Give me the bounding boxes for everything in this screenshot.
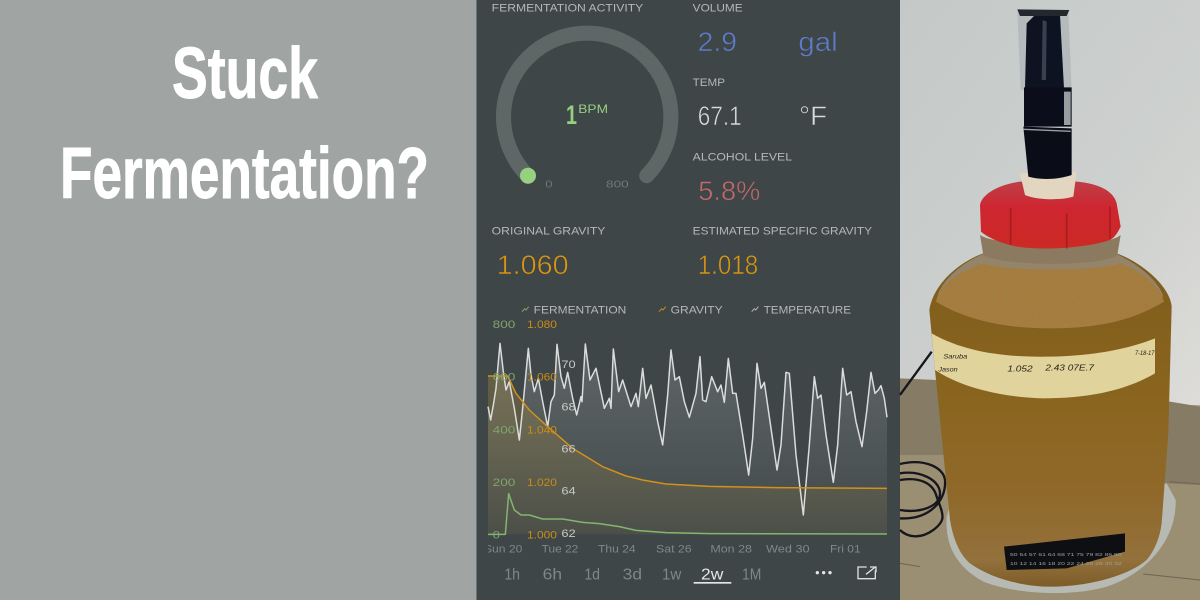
label: fermentation activity: FERMENTATION ACTIVITY xyxy=(492,3,644,15)
fermentation axis xyxy=(493,319,515,541)
foam layer xyxy=(936,263,1164,328)
temperature strip: 10 12 14 16 18 20 22 24 26 28 30 32 xyxy=(1010,561,1122,566)
metric: temperature: °F xyxy=(799,101,827,131)
temperature axis xyxy=(561,359,576,540)
temperature axis: 70 xyxy=(561,359,576,371)
metric: volume: VOLUME xyxy=(693,3,743,15)
title: Fermentation? xyxy=(60,134,429,214)
temperature line xyxy=(488,343,887,515)
fermentation axis: 200 xyxy=(493,477,515,489)
gauge: fermentation activity: 800 xyxy=(606,180,629,191)
gravity axis: 1.000 xyxy=(527,529,557,541)
metric: estimated specific gravity: 1.018 xyxy=(698,250,758,280)
handwriting: 1.052 xyxy=(1007,364,1033,374)
handwriting: Saruba xyxy=(943,353,968,360)
fermentation axis: 600 xyxy=(493,372,515,384)
metric: temperature: TEMP xyxy=(693,77,725,89)
metric: original gravity xyxy=(492,225,606,280)
temperature strip: 50 54 57 61 64 68 71 75 79 82 86 90 xyxy=(1010,552,1122,557)
time range selector: 1w xyxy=(662,566,682,583)
temperature axis: 66 xyxy=(561,443,576,455)
date axis: Sun 20 xyxy=(484,544,522,556)
glass shoulder xyxy=(937,254,1163,297)
wall xyxy=(900,0,1200,405)
chart legend: GRAVITY xyxy=(671,304,723,316)
gauge: fermentation activity: 1 xyxy=(566,100,577,130)
metric: estimated specific gravity: ESTIMATED SPECIFIC GRAVITY xyxy=(693,225,873,237)
left background panel xyxy=(0,0,476,600)
metric: alcohol level xyxy=(693,152,792,206)
date axis: Fri 01 xyxy=(830,544,861,556)
handwriting: 7-18-17 xyxy=(1135,350,1155,357)
fermentation axis: 800 xyxy=(493,319,515,331)
temperature axis: 62 xyxy=(561,528,576,540)
time range selector: 2w xyxy=(701,566,724,583)
metric: volume: 2.9 xyxy=(698,27,737,57)
metric: temperature xyxy=(693,77,827,131)
chart legend xyxy=(522,304,851,316)
gravity axis: 1.040 xyxy=(527,424,557,436)
jar neck xyxy=(980,235,1121,264)
chart legend: FERMENTATION xyxy=(534,304,626,316)
gauge: fermentation activity xyxy=(504,33,671,191)
metric: volume: gal xyxy=(798,27,838,57)
icon: more options xyxy=(816,571,832,574)
handwriting xyxy=(937,350,1155,374)
time range selector: 1M xyxy=(742,566,761,583)
line chart: fermentation, gravity, temperature xyxy=(484,304,887,584)
metric: volume xyxy=(693,3,838,57)
plate xyxy=(947,483,1176,593)
temperature axis: 64 xyxy=(561,485,576,497)
fermentation axis: 0 xyxy=(493,529,500,541)
gauge: fermentation activity: 0 xyxy=(545,180,553,191)
date axis: Sat 26 xyxy=(656,544,692,556)
chart legend: TEMPERATURE xyxy=(764,304,851,316)
label tape xyxy=(932,333,1155,398)
date axis: Thu 24 xyxy=(598,544,636,556)
time range selector: 6h xyxy=(543,566,562,583)
metric: alcohol level: ALCOHOL LEVEL xyxy=(693,152,792,164)
gravity axis xyxy=(527,319,557,541)
time range selector xyxy=(504,566,761,584)
red cap xyxy=(980,182,1121,249)
date axis: Mon 28 xyxy=(710,544,752,556)
cables xyxy=(900,352,945,536)
handwriting: 2.43 07E.7 xyxy=(1044,363,1095,373)
photo: fermenting jar with airlock xyxy=(900,0,1200,600)
date axis: Wed 30 xyxy=(766,544,810,556)
temperature axis: 68 xyxy=(561,401,576,413)
title: Stuck xyxy=(172,34,319,114)
title xyxy=(60,34,429,214)
metric: original gravity: 1.060 xyxy=(497,250,569,280)
handwriting: Jason xyxy=(937,368,958,374)
date axis xyxy=(488,544,860,552)
temperature strip xyxy=(1004,533,1125,570)
time range selector: 1h xyxy=(504,566,520,583)
airlock xyxy=(1017,9,1072,179)
gravity axis: 1.020 xyxy=(527,477,557,489)
panel: brewing dashboard xyxy=(476,0,900,600)
time range selector: 1d xyxy=(584,566,600,583)
fermentation line xyxy=(488,494,887,534)
metric: alcohol level: 5.8% xyxy=(698,176,760,206)
gravity line xyxy=(488,376,887,488)
jar body xyxy=(929,253,1172,587)
fermentation axis: 400 xyxy=(493,424,515,436)
date axis: Tue 22 xyxy=(542,544,578,556)
metric: original gravity: ORIGINAL GRAVITY xyxy=(492,225,606,237)
time range selector: 3d xyxy=(623,566,642,583)
metric: temperature: 67.1 xyxy=(698,101,742,131)
floor tiles xyxy=(900,378,1200,600)
gravity axis: 1.080 xyxy=(527,319,557,331)
icon: export xyxy=(858,567,876,579)
metric: estimated specific gravity xyxy=(693,225,873,280)
gauge: fermentation activity: BPM xyxy=(578,102,608,116)
gravity axis: 1.060 xyxy=(527,372,557,384)
rubber stopper xyxy=(1020,172,1077,199)
